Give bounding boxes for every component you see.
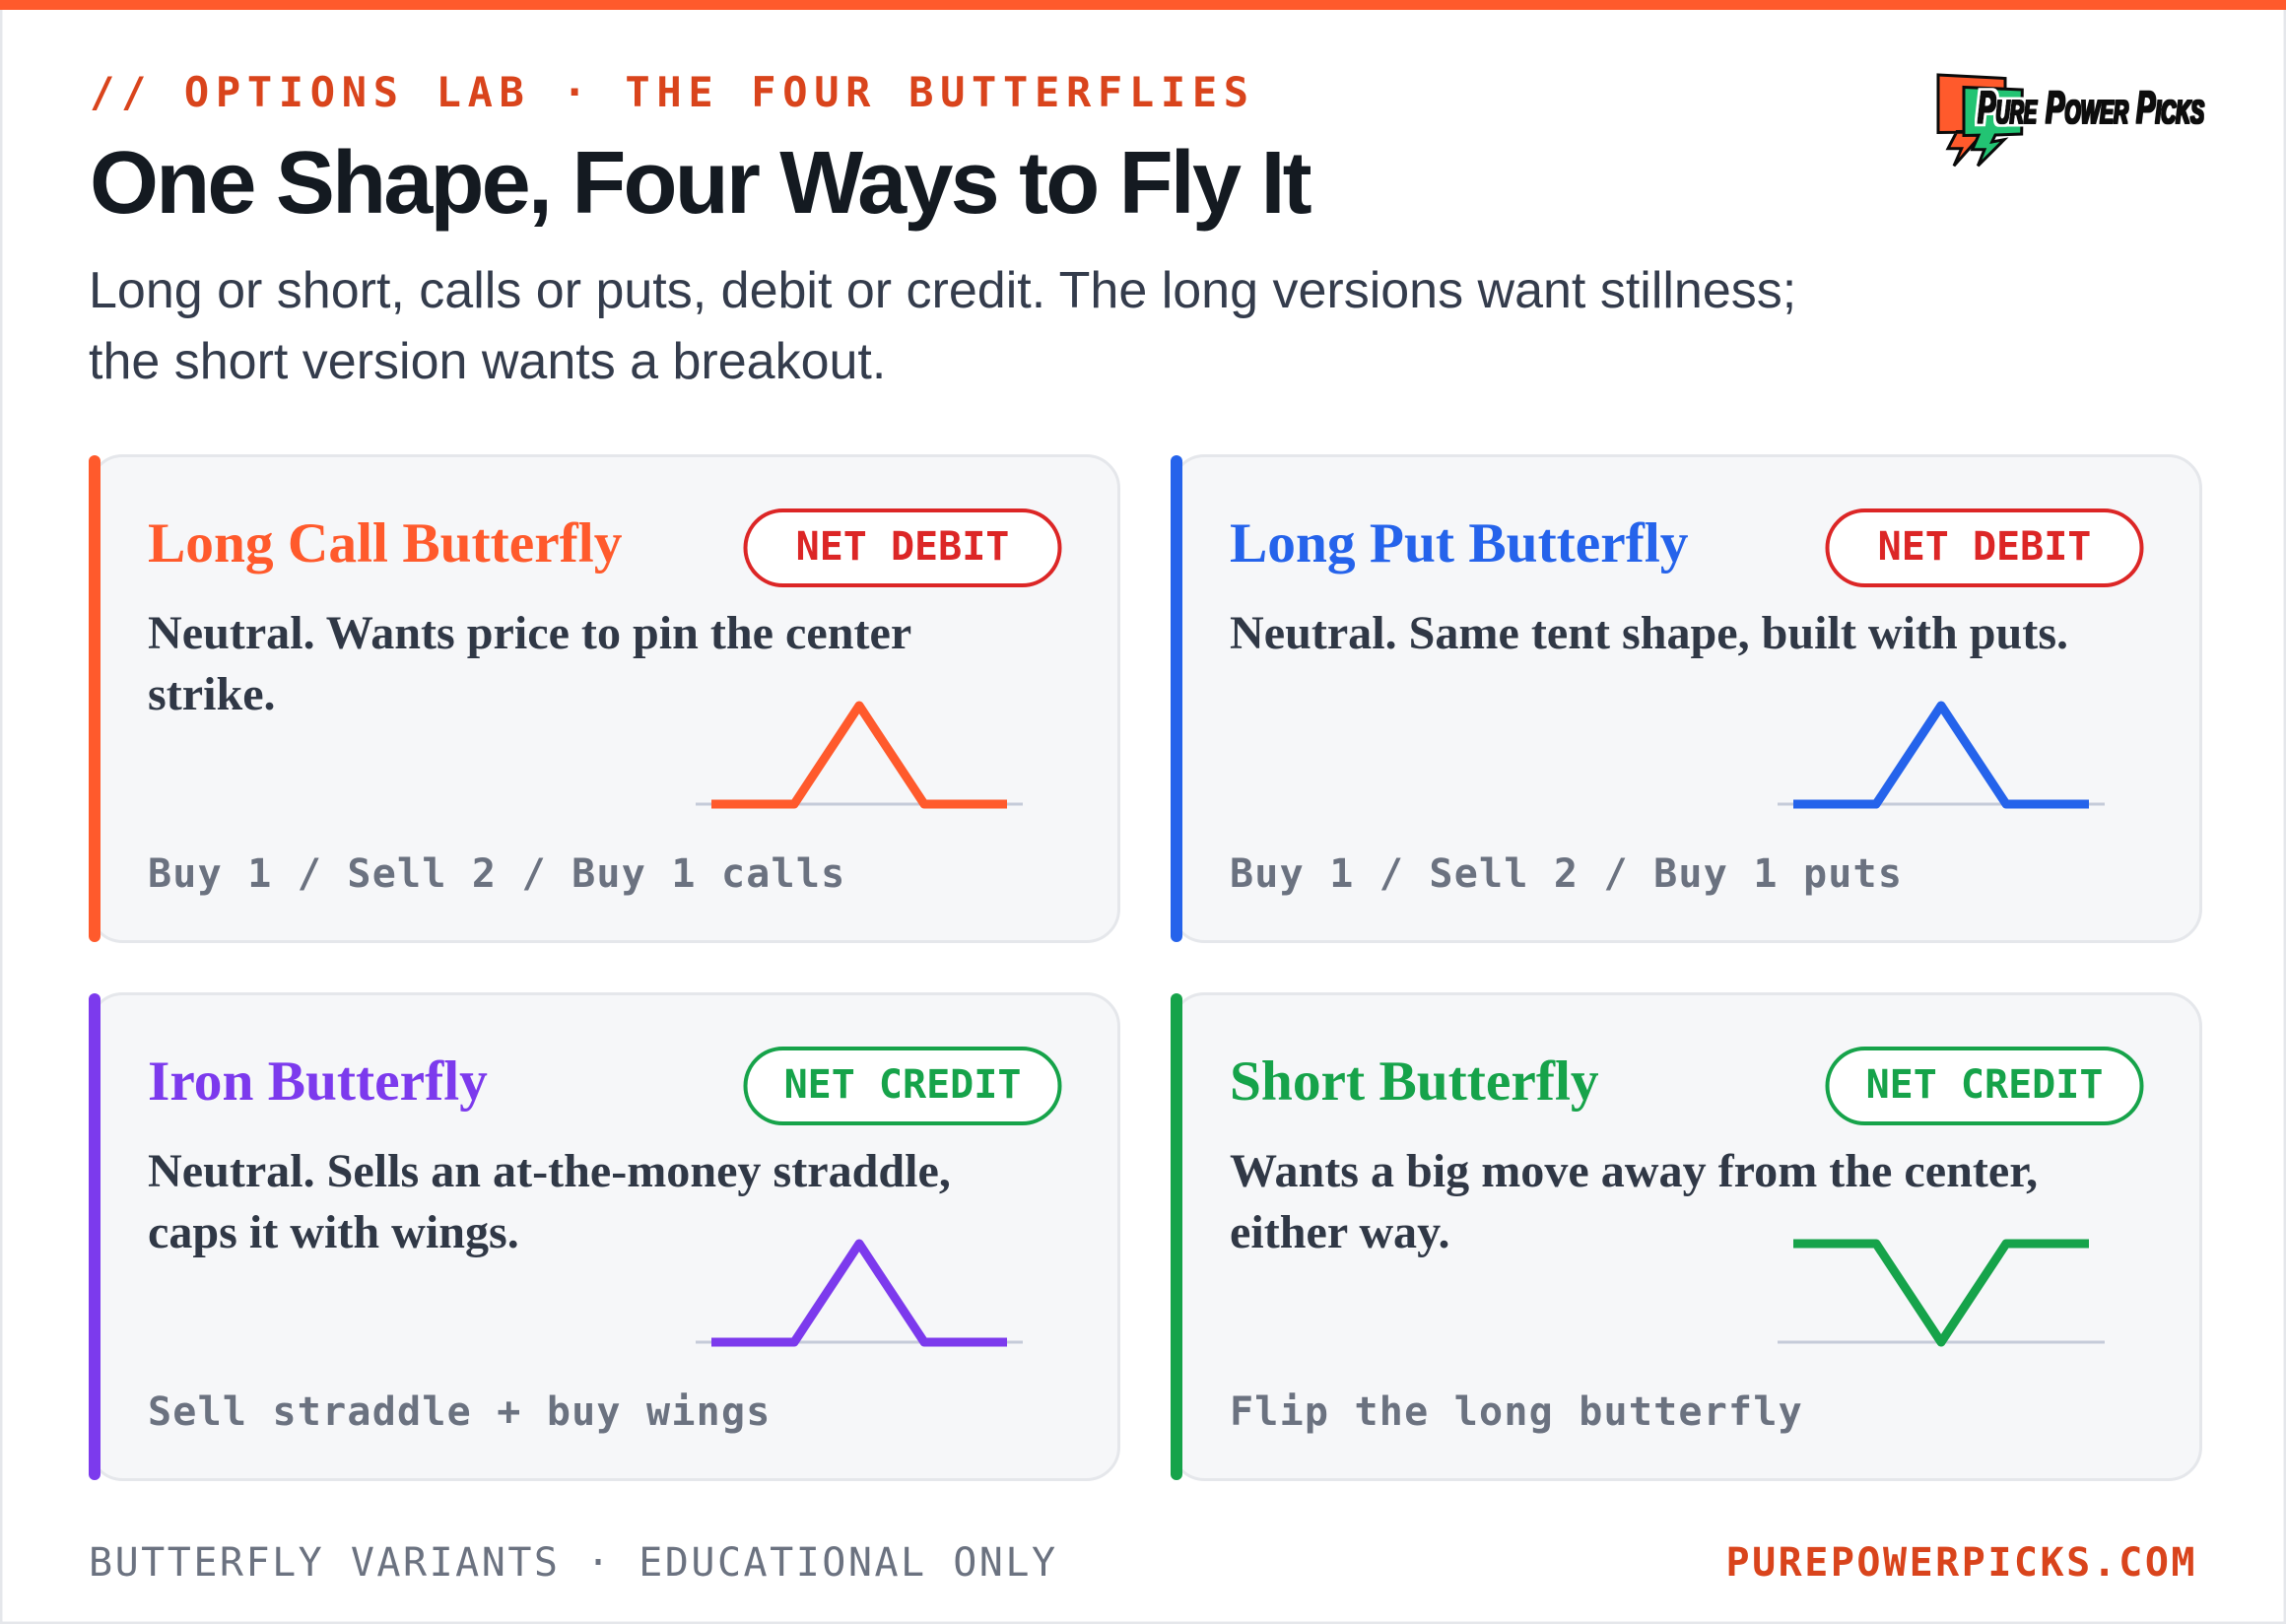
accent bar <box>1171 993 1182 1480</box>
structure note: Buy 1 / Sell 2 / Buy 1 puts <box>1230 851 1903 897</box>
description: either way. <box>1230 1206 1450 1258</box>
badge: net credit <box>745 1049 1060 1123</box>
description: Wants a big move away from the center, <box>1230 1145 2038 1197</box>
logo wordmark: PICKS <box>2136 82 2204 133</box>
icon: orange speech bolt <box>1938 75 2005 166</box>
logo wordmark: POWER <box>2046 82 2128 133</box>
eyebrow: // OPTIONS LAB · THE FOUR BUTTERFLIES <box>90 68 1255 116</box>
logo wordmark: PURE <box>1978 82 2038 133</box>
panel: Iron Butterfly <box>89 993 1119 1480</box>
card heading: Long Put Butterfly <box>1230 512 1689 575</box>
payoff chart: tent <box>1778 706 2105 804</box>
accent bar <box>89 455 101 942</box>
description: caps it with wings. <box>148 1206 519 1258</box>
top accent bar <box>0 0 2286 10</box>
description <box>1230 1145 2038 1258</box>
panel: Long Put Butterfly <box>1171 455 2201 942</box>
description: Neutral. Wants price to pin the center <box>148 607 911 659</box>
badge: net credit: NET CREDIT <box>1866 1062 2103 1108</box>
badge: net debit <box>745 510 1060 585</box>
panel: Long Call Butterfly <box>89 455 1119 942</box>
structure note: Flip the long butterfly <box>1230 1389 1803 1435</box>
panel: Short Butterfly <box>1171 993 2201 1480</box>
badge: net credit: NET CREDIT <box>784 1062 1021 1108</box>
logo: Pure Power Picks <box>1938 75 2204 166</box>
badge: net credit <box>1827 1049 2142 1123</box>
description <box>148 607 911 720</box>
payoff chart: inverted tent <box>1778 1244 2105 1342</box>
description <box>148 1145 951 1258</box>
card heading: Iron Butterfly <box>148 1050 488 1113</box>
badge: net debit: NET DEBIT <box>796 524 1009 570</box>
accent bar <box>1171 455 1182 942</box>
structure note: Sell straddle + buy wings <box>148 1389 772 1435</box>
card heading: Long Call Butterfly <box>148 512 623 575</box>
subtitle <box>89 262 1796 390</box>
structure note: Buy 1 / Sell 2 / Buy 1 calls <box>148 851 845 897</box>
payoff chart: tent <box>696 706 1023 804</box>
badge: net debit: NET DEBIT <box>1878 524 2091 570</box>
logo wordmark <box>1978 82 2204 133</box>
card heading: Short Butterfly <box>1230 1050 1599 1113</box>
payoff chart: tent <box>696 1244 1023 1342</box>
subtitle: Long or short, calls or puts, debit or credit. The long versions want stillness; <box>89 262 1796 319</box>
subtitle: the short version wants a breakout. <box>89 333 886 390</box>
description: Neutral. Sells an at-the-money straddle, <box>148 1145 951 1197</box>
description: strike. <box>148 668 276 720</box>
description: Neutral. Same tent shape, built with puts. <box>1230 607 2068 659</box>
footer left: BUTTERFLY VARIANTS · EDUCATIONAL ONLY <box>89 1540 1058 1586</box>
badge: net debit <box>1827 510 2142 585</box>
accent bar <box>89 993 101 1480</box>
footer right: PUREPOWERPICKS.COM <box>1726 1540 2197 1586</box>
title: One Shape, Four Ways to Fly It <box>90 134 1311 233</box>
icon: green speech bolt <box>1964 87 2022 166</box>
